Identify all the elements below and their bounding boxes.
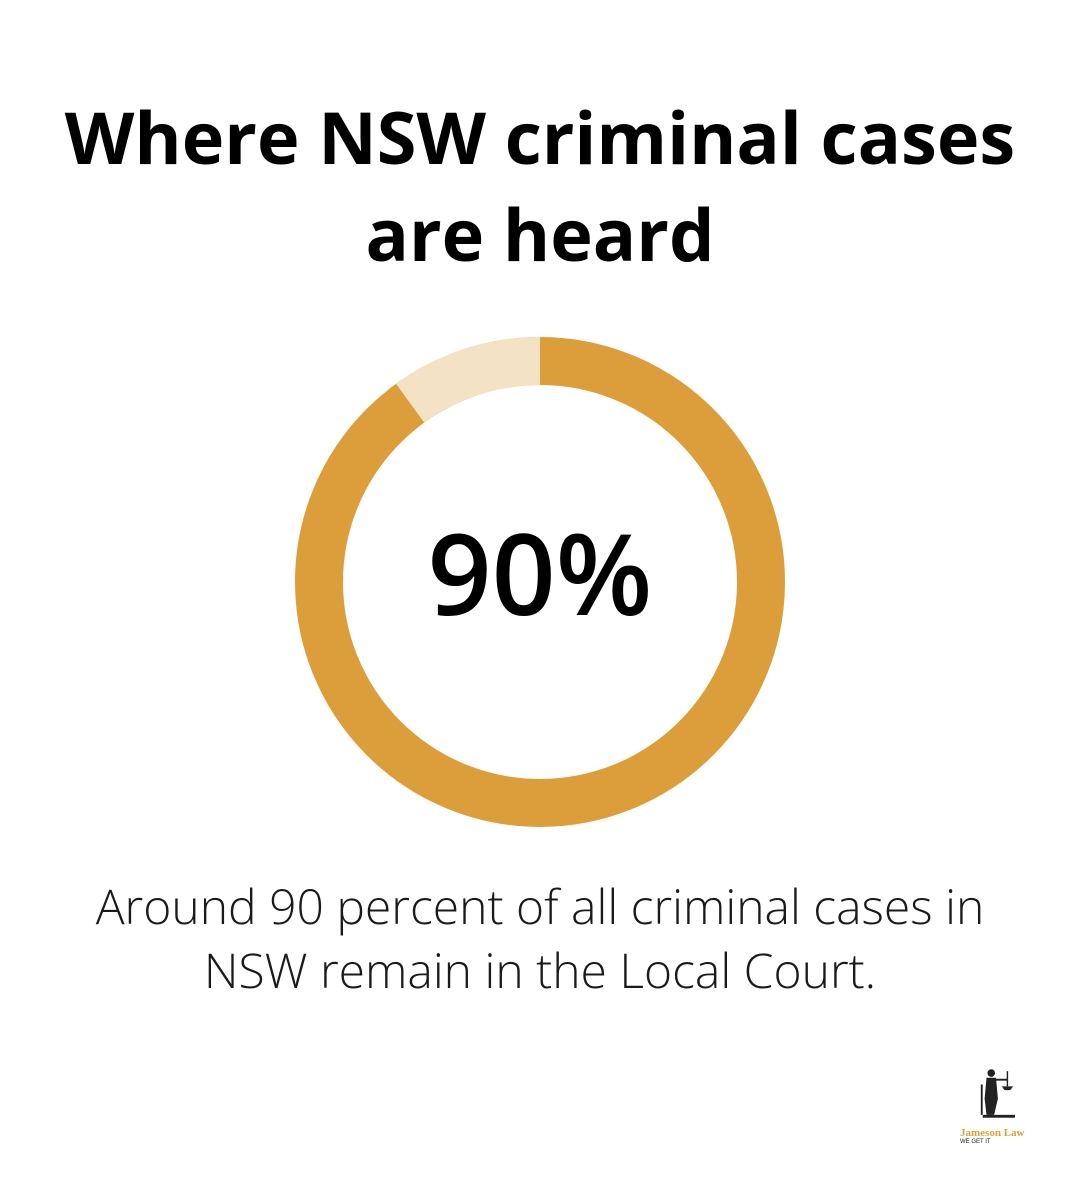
title [64, 88, 1015, 283]
caption: NSW remain in the Local Court. [204, 938, 876, 1003]
donut: remaining 10% segment [410, 361, 540, 403]
icon: lady justice [980, 1069, 1015, 1118]
title: Where NSW criminal cases [65, 88, 1015, 186]
logo: Jameson Law: WE GET IT [960, 1139, 991, 1145]
caption [96, 874, 984, 1003]
logo text: Jameson Law [960, 1127, 1024, 1139]
title: are heard [365, 185, 715, 283]
caption: Around 90 percent of all criminal cases in [96, 874, 984, 939]
center value: 90% [428, 495, 652, 648]
logo: Jameson Law [960, 1069, 1024, 1145]
donut: 90% segment [319, 361, 761, 803]
